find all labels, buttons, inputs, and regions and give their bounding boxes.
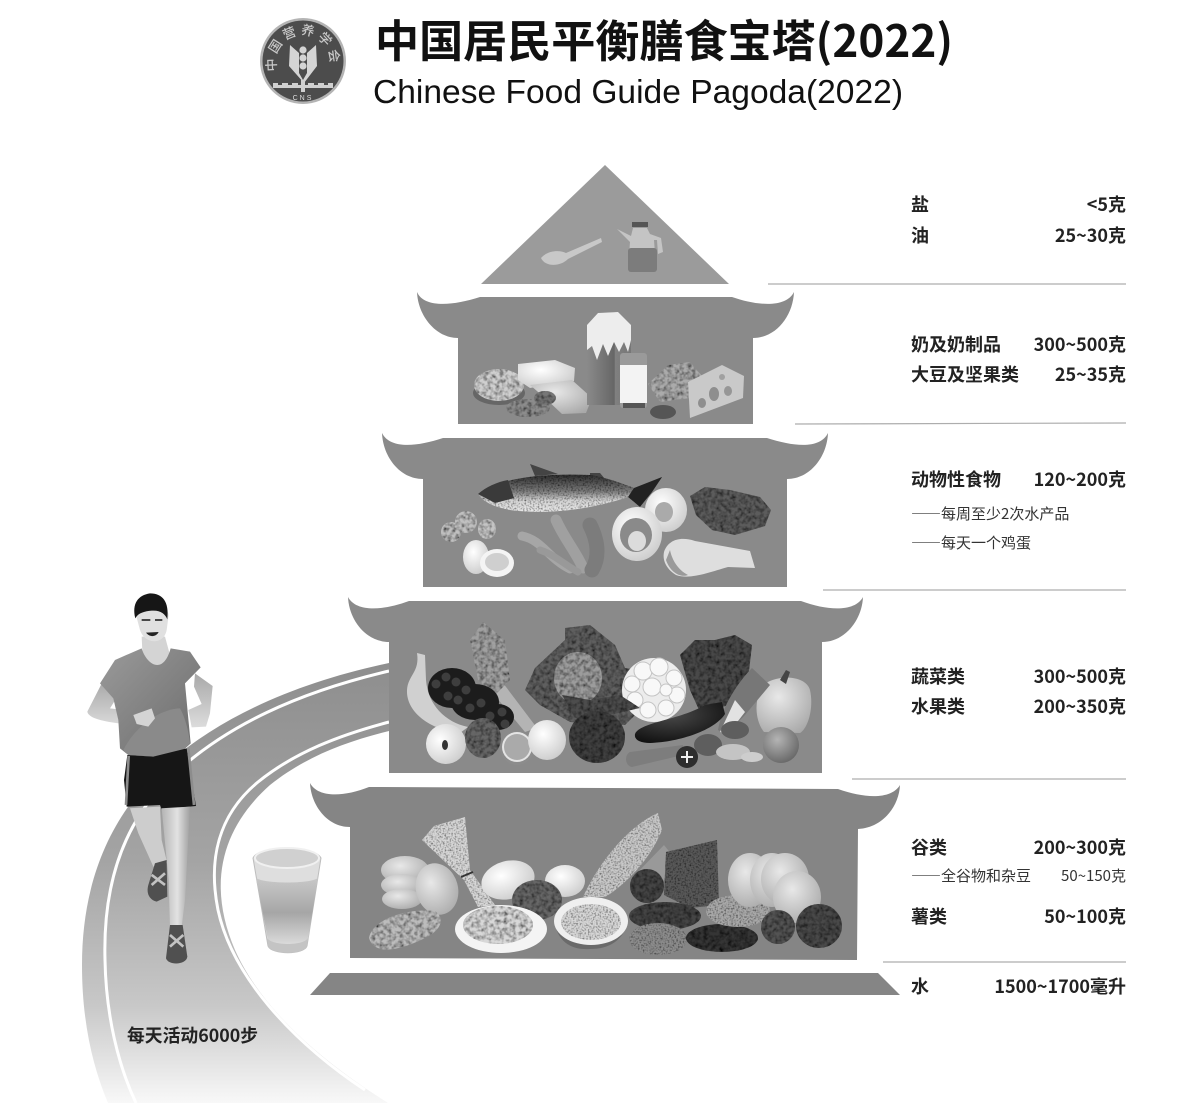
- legend: grains and tubers: 谷类: [911, 834, 947, 860]
- food: scallops: [612, 488, 687, 561]
- head: [136, 602, 169, 641]
- food: apple: [528, 720, 566, 760]
- food: pepper: [757, 670, 811, 733]
- title: English: Chinese Food Guide Pagoda(2022): [373, 73, 903, 110]
- legend: grains and tubers: ——全谷物和杂豆: [911, 865, 1031, 886]
- food: cheese: [688, 365, 744, 418]
- shirt: [100, 648, 201, 757]
- food: black beans: [686, 924, 758, 952]
- food: orange half: [500, 731, 534, 765]
- icon: glass of water: [253, 848, 321, 953]
- food: brown bread: [664, 840, 719, 908]
- food: mixed nuts: [648, 362, 702, 419]
- food: shrimp: [522, 520, 597, 572]
- food: cauliflower: [622, 658, 686, 722]
- legend: dairy, soy and nuts: 300~500克: [1034, 331, 1126, 357]
- neck: [142, 637, 170, 668]
- pagoda tier: grains and tubers: [310, 783, 900, 960]
- legend: dairy, soy and nuts: 25~35克: [1055, 361, 1126, 387]
- food: dark grains: [630, 869, 664, 903]
- legend: animal foods: 动物性食物: [911, 466, 1001, 492]
- food: bok choy: [718, 668, 770, 735]
- runner figure: [87, 593, 213, 964]
- food: steamed bun: [477, 855, 539, 905]
- front leg: [162, 807, 190, 927]
- food: taro: [761, 904, 842, 948]
- food: chicken drumstick: [664, 539, 755, 577]
- legend: salt and oil: [911, 191, 1126, 248]
- food: soybeans: [473, 369, 525, 405]
- food: corn: [583, 813, 672, 897]
- food: mixed grains: [629, 923, 687, 955]
- pagoda tier: dairy, soy and nuts: [417, 292, 794, 424]
- legend: salt and oil: <5克: [1087, 191, 1126, 217]
- legend: grains and tubers: 200~300克: [1034, 834, 1126, 860]
- legend: animal foods: ——每天一个鸡蛋: [911, 532, 1031, 553]
- food: eggplant: [635, 702, 725, 743]
- food: milk carton: [587, 312, 631, 405]
- food: banana: [407, 653, 468, 733]
- pagoda tier: salt and oil roof: [481, 165, 729, 284]
- icon: oil bottle: [617, 222, 663, 272]
- food: apple half: [420, 718, 472, 770]
- legend: salt and oil: 盐: [911, 191, 929, 217]
- food: celery: [470, 622, 537, 732]
- legend: vegetables and fruit: 蔬菜类: [911, 663, 965, 689]
- face features: [142, 617, 162, 622]
- food: mushrooms: [676, 721, 763, 768]
- front shoe: [166, 925, 187, 964]
- pagoda tier: animal foods: [382, 433, 828, 587]
- legend: animal foods: ——每周至少2次水产品: [911, 503, 1069, 524]
- back arm: [188, 673, 213, 727]
- label: daily activity: 每天活动6000步: [127, 1022, 258, 1048]
- food: tofu: [518, 360, 592, 414]
- shorts: [124, 748, 196, 809]
- food: kiwi: [465, 718, 501, 758]
- legend: grains and tubers: 50~100克: [1044, 903, 1126, 929]
- legend: vegetables and fruit: 200~350克: [1034, 693, 1126, 719]
- legend: dairy, soy and nuts: 奶及奶制品: [911, 331, 1001, 357]
- legend: water: 水: [911, 973, 929, 999]
- food: light grains: [706, 895, 770, 927]
- legend: grains and tubers: 50~150克: [1061, 865, 1126, 886]
- food: sweet potato slices: [728, 853, 821, 923]
- food: walnuts: [506, 391, 556, 417]
- food: potato: [369, 911, 441, 950]
- food: noodles bundle: [422, 817, 495, 907]
- food: carrot: [626, 745, 683, 767]
- running track: [82, 663, 389, 1103]
- food: dark cabbage: [562, 695, 640, 763]
- legend: vegetables and fruit: [911, 663, 1126, 719]
- food: leafy cabbage: [525, 625, 650, 725]
- shirt shading: [123, 708, 190, 757]
- food: fish: [478, 464, 662, 512]
- pagoda base: water: [310, 973, 900, 995]
- pagoda tier: vegetables and fruit: [348, 597, 863, 773]
- food: small bun: [545, 865, 585, 897]
- food: spinach: [680, 635, 752, 712]
- legend: dairy, soy and nuts: [911, 331, 1126, 387]
- food: glass of milk: [620, 353, 647, 408]
- legend: grains and tubers: 薯类: [911, 903, 947, 929]
- title: Chinese: 中国居民平衡膳食宝塔(2022): [375, 5, 953, 70]
- food: boiled eggs: [463, 540, 514, 577]
- legend: salt and oil: 油: [911, 222, 929, 248]
- legend: water: [911, 973, 1126, 999]
- back shoe: [148, 860, 167, 902]
- food: rice bowl: [554, 897, 628, 949]
- logo: Chinese Nutrition Society: 中国营养学会: [265, 24, 340, 70]
- legend: grains and tubers: [911, 834, 1126, 929]
- food: dark bun: [512, 880, 562, 920]
- legend: vegetables and fruit: 水果类: [911, 693, 965, 719]
- front arm: [87, 682, 153, 727]
- food: grapes: [428, 668, 514, 730]
- legend: water: 1500~1700毫升: [994, 973, 1126, 999]
- food: dumplings: [455, 905, 547, 953]
- legend: vegetables and fruit: 300~500克: [1034, 663, 1126, 689]
- dividers: [768, 284, 1126, 962]
- food: beef: [690, 487, 771, 535]
- food: quail eggs: [441, 511, 496, 542]
- hair: [134, 593, 168, 619]
- legend: animal foods: [911, 466, 1126, 553]
- hand: [133, 708, 155, 727]
- legend: dairy, soy and nuts: 大豆及坚果类: [911, 361, 1019, 387]
- legend: salt and oil: 25~30克: [1055, 222, 1126, 248]
- food: tomato: [763, 727, 799, 763]
- legend: animal foods: 120~200克: [1034, 466, 1126, 492]
- logo: Chinese Nutrition Society: CNS: [293, 95, 313, 102]
- logo: Chinese Nutrition Society: [260, 18, 346, 104]
- food: cookies: [381, 856, 464, 920]
- back leg: [130, 807, 167, 867]
- food: red beans: [629, 902, 701, 930]
- icon: salt spoon: [541, 238, 602, 265]
